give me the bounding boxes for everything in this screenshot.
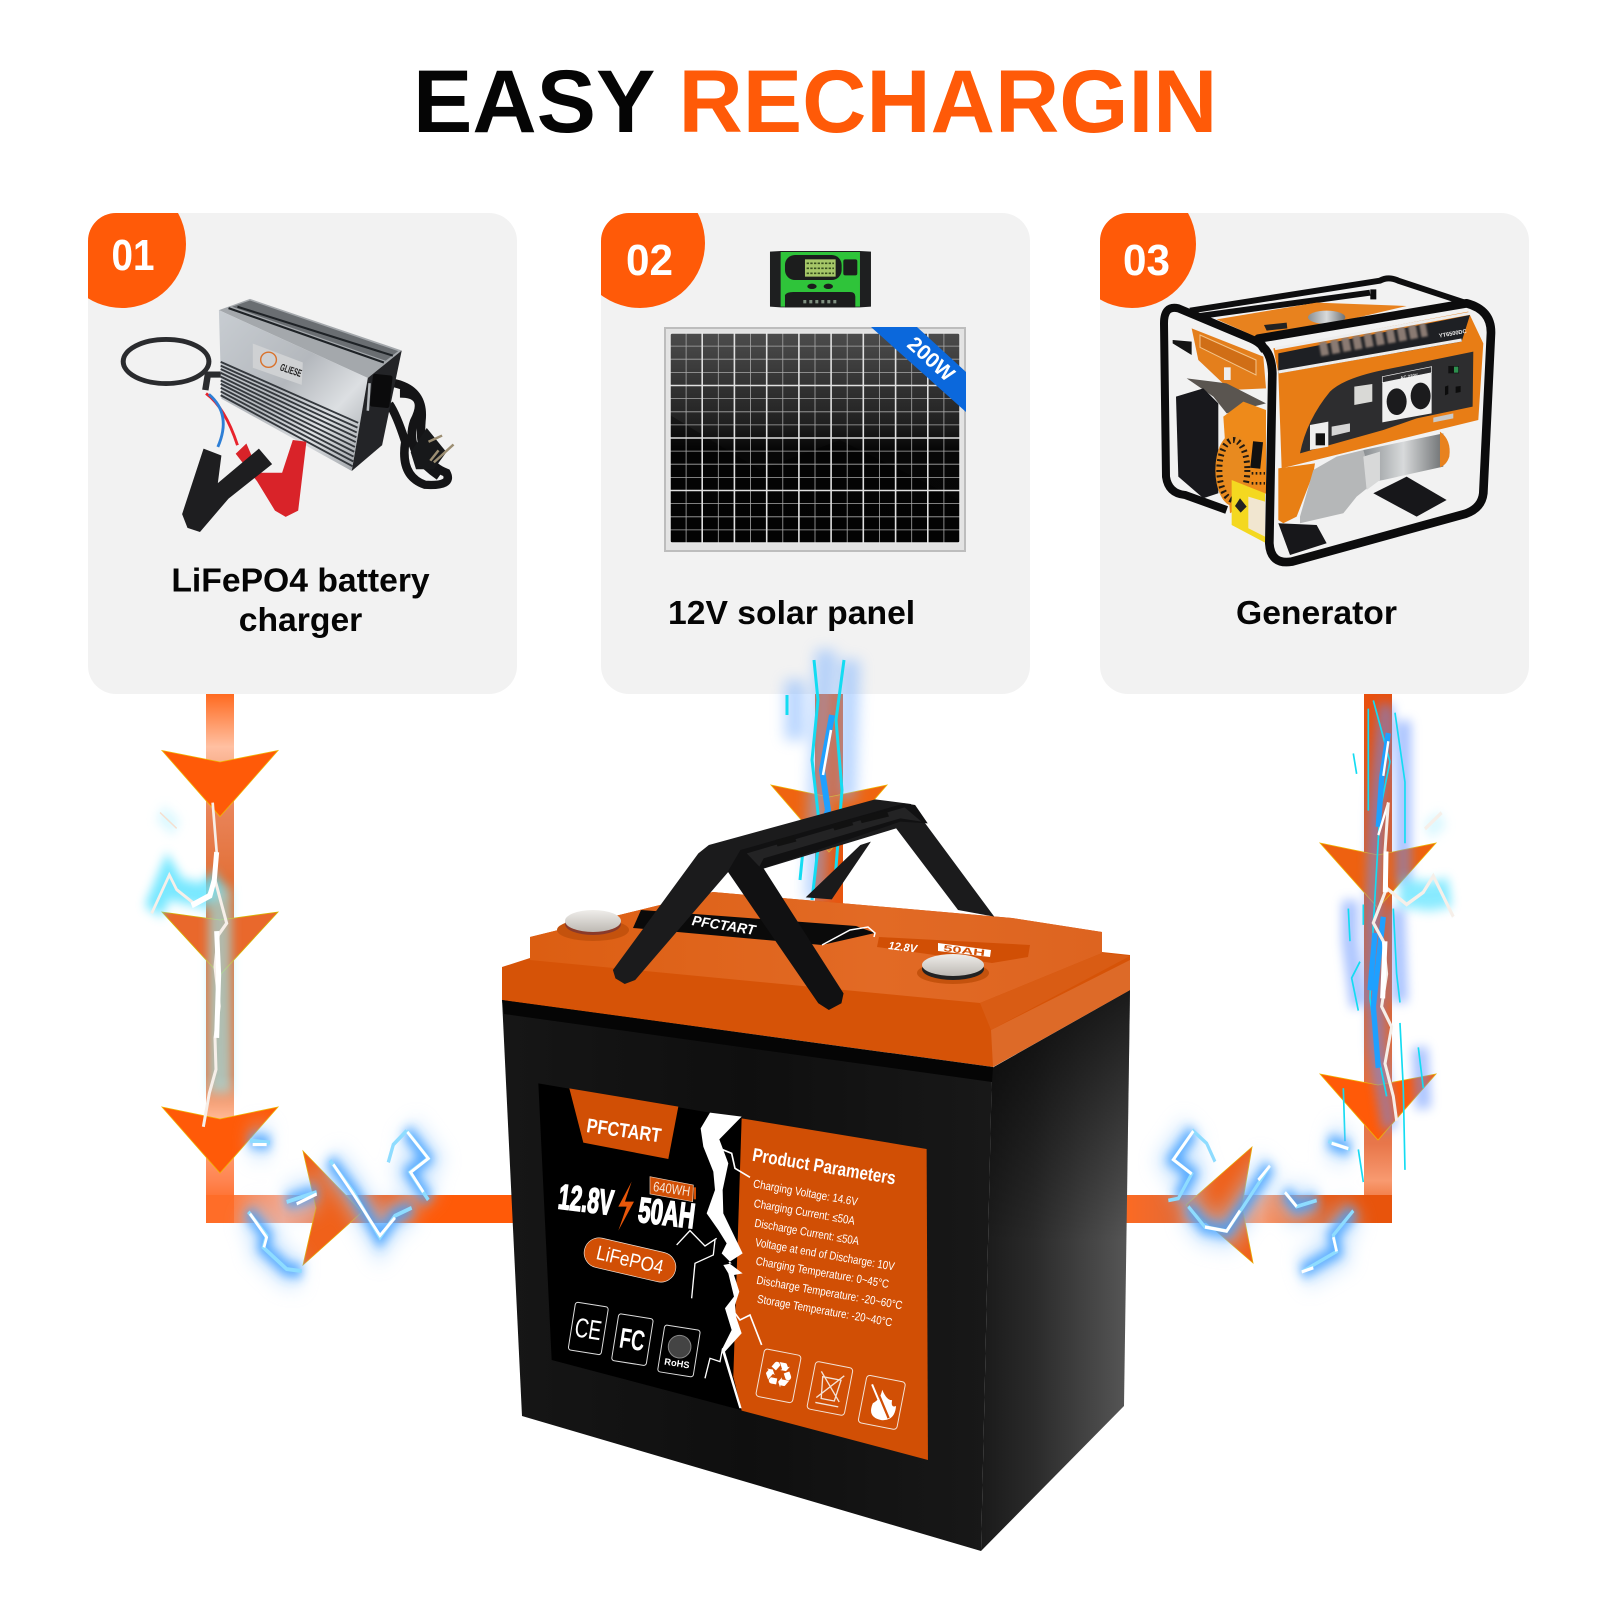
lid brand text: PFCTART	[691, 912, 758, 938]
icon: recycle: ♻	[759, 1353, 798, 1398]
chevron 4	[303, 1151, 362, 1265]
parameters list: Charging Temperature: 0~45°C	[755, 1255, 890, 1291]
FC mark	[611, 1314, 653, 1366]
parameters list	[752, 1177, 903, 1329]
terminal left	[557, 910, 629, 941]
arrow: middle charging line	[771, 694, 887, 924]
icon: generator: AC 220V	[1400, 372, 1418, 380]
terminal right	[917, 954, 989, 984]
badge 02: 02	[626, 236, 673, 285]
parameters list: Storage Temperature: -20~40°C	[756, 1293, 893, 1329]
RoHS mark	[657, 1325, 700, 1377]
label: Generator: Generator	[1236, 594, 1397, 632]
label: 12V solar panel: 12V solar panel	[668, 594, 915, 632]
icon: generator	[1164, 278, 1491, 562]
panel: card 02 solar	[601, 213, 1030, 694]
arrow: right charging line	[1120, 694, 1436, 1263]
LiFePO4 pill	[581, 1235, 679, 1285]
chevron 3	[162, 1107, 278, 1173]
label: LiFePO4 battery charger: charger	[239, 601, 362, 639]
lid lightning mark	[822, 927, 875, 945]
lid spec strip: 12.8V	[888, 940, 919, 956]
CE mark: CE	[573, 1311, 604, 1346]
parameters list: Discharge Current: ≤50A	[753, 1217, 860, 1248]
brand tag: PFCTART	[585, 1115, 663, 1147]
icon: battery charger: GLIESE	[278, 362, 303, 380]
parameters list: Voltage at end of Discharge: 10V	[754, 1236, 896, 1274]
icon: no fire	[858, 1375, 906, 1430]
badge 01: 01	[112, 231, 154, 280]
icon: battery charger	[123, 299, 454, 532]
brand tag	[569, 1088, 678, 1159]
chevron 2	[1320, 1074, 1436, 1140]
icon: recycle	[756, 1349, 801, 1403]
battery	[502, 799, 1130, 1551]
chevron 2	[162, 912, 278, 975]
panel: card 03 generator	[1100, 213, 1529, 694]
lid spec strip	[877, 937, 1030, 963]
badge 03	[1100, 213, 1196, 308]
lightning: middle bolts	[787, 650, 850, 900]
arrow: left charging line	[162, 694, 516, 1265]
ribbon: 200W	[871, 327, 966, 412]
parameters list: Charging Current: ≤50A	[753, 1197, 856, 1228]
FC mark: FC	[617, 1323, 647, 1358]
label black background	[538, 1083, 743, 1411]
bolt icon	[618, 1182, 634, 1231]
icon: generator: YT6500DC	[1439, 329, 1467, 340]
parameters list: Charging Voltage: 14.6V	[752, 1177, 859, 1209]
640WH tag: 640WH	[652, 1178, 691, 1199]
badge 01	[88, 213, 186, 308]
label: LiFePO4 battery charger: LiFePO4 battery	[171, 562, 430, 600]
lid spec strip: 50AH	[943, 943, 986, 958]
LiFePO4 pill: LiFePO4	[594, 1242, 666, 1279]
lightning: right horizontal bolts	[1168, 1131, 1353, 1272]
lightning: left vertical bolt	[152, 803, 227, 1127]
panel: card 01 charger	[88, 213, 517, 694]
voltage text: 12.8V	[556, 1177, 616, 1223]
lightning: left horizontal bolts	[248, 1131, 428, 1271]
chevron 1	[1320, 843, 1436, 908]
title: EASY RECHARGIN	[413, 51, 1217, 151]
chevron 3	[1186, 1147, 1253, 1263]
battery label	[538, 1083, 928, 1460]
handle	[613, 799, 994, 1010]
chevron 1	[162, 750, 278, 816]
capacity text: 50AH	[636, 1191, 697, 1236]
lightning: right vertical bolts	[1343, 700, 1453, 1182]
icon: solar charge controller	[770, 251, 871, 307]
product parameters heading: Product Parameters	[751, 1144, 897, 1189]
parameters list: Discharge Temperature: -20~60°C	[755, 1274, 903, 1312]
badge 03: 03	[1123, 236, 1170, 285]
chevron	[771, 785, 887, 852]
battery side face	[981, 990, 1130, 1551]
lightning crack	[677, 1113, 762, 1408]
CE mark	[568, 1302, 609, 1355]
icon: solar panel	[665, 328, 965, 551]
battery front face	[502, 999, 992, 1551]
ribbon: 200W: 200W	[903, 332, 959, 386]
badge 02	[601, 213, 705, 308]
RoHS mark: RoHS	[664, 1357, 690, 1370]
battery lid	[502, 892, 1130, 1082]
label orange panel	[733, 1118, 928, 1460]
icon: no trash	[807, 1361, 853, 1416]
lid label dark band	[633, 910, 875, 945]
